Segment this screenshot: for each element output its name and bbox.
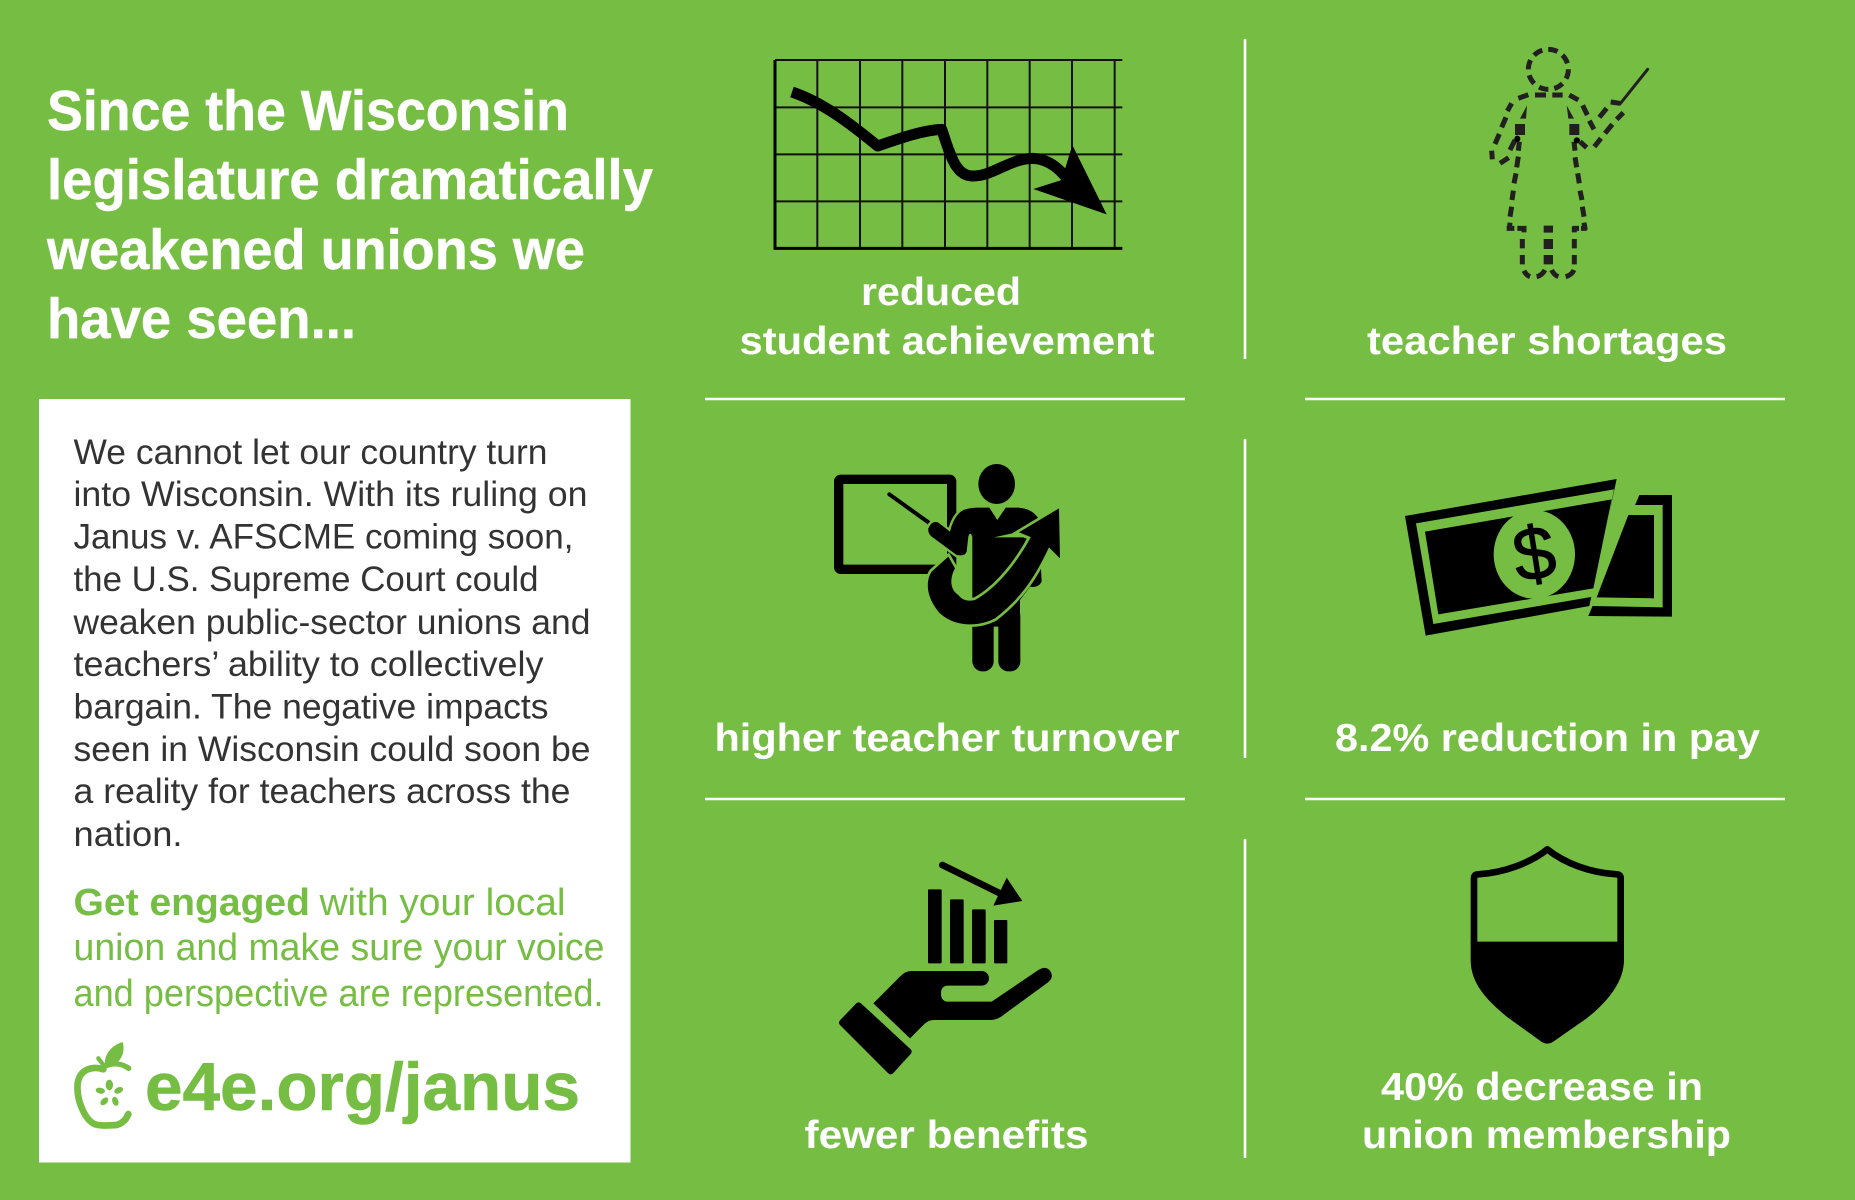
label: 40% decrease in: [1381, 1066, 1703, 1109]
body text: the U.S. Supreme Court could: [74, 560, 538, 599]
panel: teacher shortages: [1367, 49, 1727, 363]
label: [1362, 1066, 1731, 1157]
title: legislature dramatically: [47, 148, 653, 212]
body text: weaken public-sector unions and: [72, 603, 590, 642]
title: Since the Wisconsin: [47, 79, 569, 143]
call to action text: with your local: [318, 882, 566, 924]
call to action text: Get engaged: [74, 882, 310, 924]
label: 8.2% reduction in pay: [1335, 717, 1760, 760]
panel: reduction in pay: [1335, 479, 1760, 760]
label: reduced: [861, 271, 1021, 314]
body text: seen in Wisconsin could soon be: [74, 730, 590, 769]
icon: torn dollar bill: $: [1507, 509, 1561, 598]
call to action text: union and make sure your voice: [74, 927, 604, 969]
label: teacher shortages: [1367, 320, 1727, 363]
body text: bargain. The negative impacts: [74, 688, 548, 726]
dividers: [705, 39, 1785, 1158]
body text: a reality for teachers across the: [74, 772, 570, 811]
icon: half-filled shield: [1471, 849, 1624, 1044]
body text: into Wisconsin. With its ruling on: [74, 475, 588, 514]
panel: call to action: [39, 399, 630, 1162]
body text: Janus v. AFSCME coming soon,: [74, 518, 574, 556]
icon: torn dollar bill: [1405, 479, 1672, 636]
panel: fewer benefits: [804, 865, 1088, 1157]
body text: We cannot let our country turn: [74, 433, 548, 472]
body text: nation.: [74, 815, 182, 854]
icon: hand holding falling bar chart: [842, 865, 1052, 1071]
icon: teacher at board with rising arrow: [839, 464, 1060, 671]
label: student achievement: [740, 320, 1155, 363]
website url: e4e.org/janus: [145, 1049, 580, 1125]
label: fewer benefits: [804, 1114, 1088, 1157]
label: [740, 271, 1155, 363]
icon: apple logo: [77, 1042, 129, 1126]
label: union membership: [1362, 1114, 1731, 1157]
panel: higher teacher turnover: [714, 464, 1180, 760]
call to action text: [74, 882, 604, 1015]
icon: falling line chart: [775, 60, 1122, 248]
panel: reduced student achievement: [740, 60, 1155, 363]
title: [46, 79, 653, 351]
panel: union membership: [1362, 849, 1731, 1157]
body text: teachers’ ability to collectively: [74, 645, 544, 684]
call to action text: and perspective are represented.: [74, 973, 604, 1015]
body text: [72, 433, 590, 854]
title: have seen...: [47, 287, 356, 351]
label: higher teacher turnover: [714, 717, 1180, 760]
icon: dashed teacher outline: [1492, 49, 1648, 277]
title: weakened unions we: [46, 218, 585, 282]
